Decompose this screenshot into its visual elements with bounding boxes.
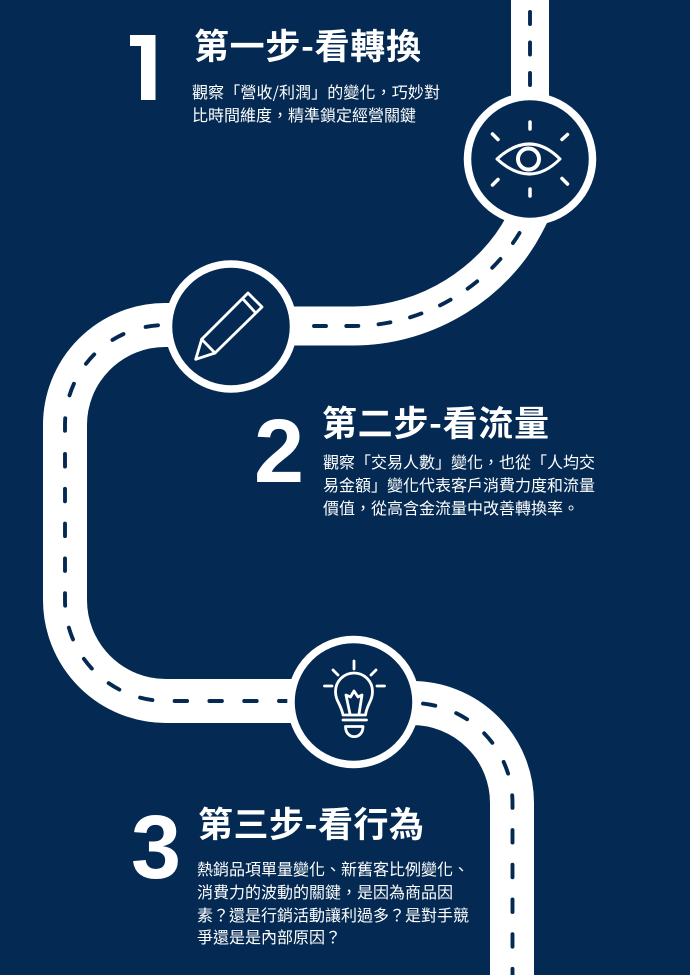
step 1 title: 第一步-看轉換 — [194, 19, 421, 70]
step 1 description — [192, 79, 440, 126]
step 2 description: 觀察「交易人數」變化，也從「人均交 — [323, 449, 595, 473]
step 3 description: 熱銷品項單量變化、新舊客比例變化、 — [197, 856, 469, 880]
step 3 title: 第三步-看行為 — [198, 797, 424, 848]
icon: pencil in circle — [168, 264, 294, 389]
road: winding path — [65, 0, 537, 975]
step 1 description: 比時間維度，精準鎖定經營關鍵 — [192, 102, 416, 126]
step 1 description: 觀察「營收/利潤」的變化，巧妙對 — [192, 79, 440, 103]
step 3 description: 爭還是是內部原因？ — [197, 924, 341, 948]
step 1 number — [130, 35, 156, 100]
step 3 description — [197, 856, 469, 948]
step 2 number: 2 — [254, 402, 304, 502]
step 2 title: 第二步-看流量 — [322, 396, 549, 447]
step 3 number: 3 — [131, 798, 181, 898]
step 1 number: 1 — [122, 20, 172, 120]
step 2 description: 價值，從高含金流量中改善轉換率。 — [323, 495, 579, 519]
step 2 description: 易金額」變化代表客戶消費力度和流量 — [323, 472, 595, 496]
icon: eye in circle — [468, 96, 592, 222]
step 3 description: 消費力的波動的關鍵，是因為商品因 — [197, 879, 453, 903]
step 2 description — [323, 449, 595, 519]
icon: light bulb in circle — [291, 640, 416, 764]
step 3 description: 素？還是行銷活動讓利過多？是對手競 — [197, 902, 469, 926]
